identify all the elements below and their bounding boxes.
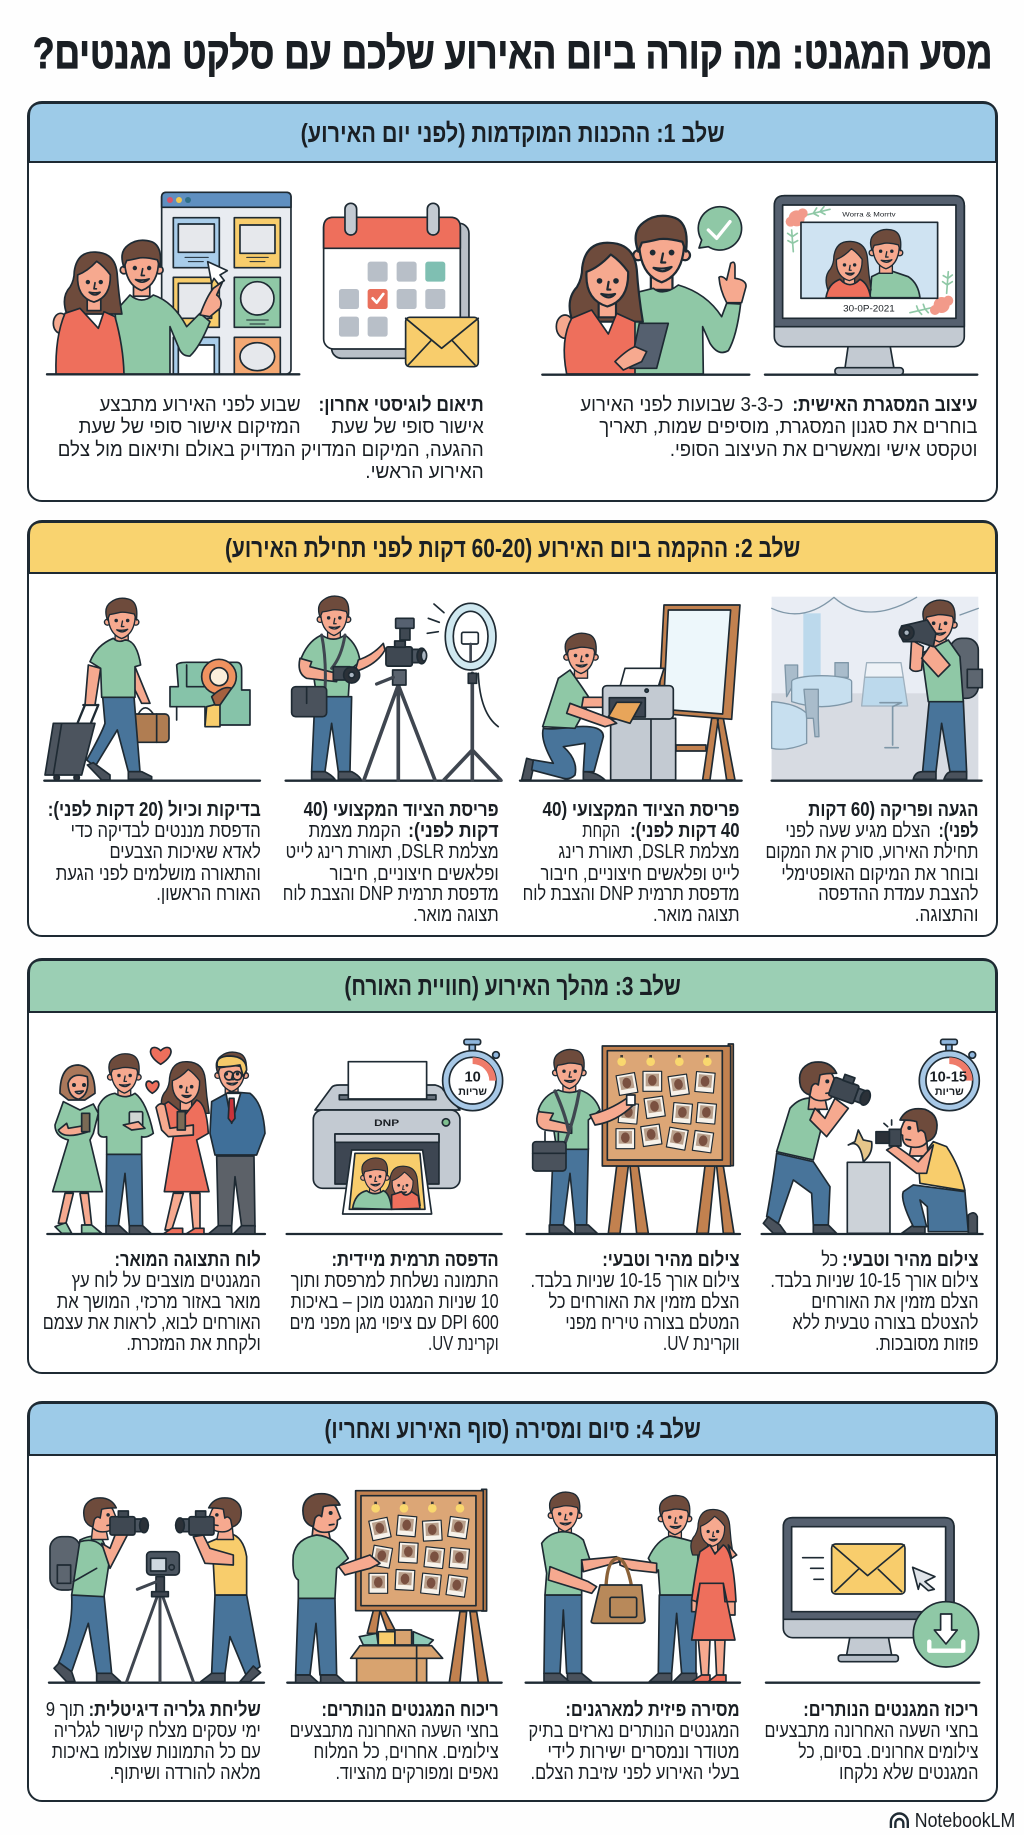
text: arrival and unpacking: הגעה ופריקה (60 דקות	[808, 799, 978, 821]
illustration: DNP printer with 10 second stopwatch: DNP	[374, 1118, 399, 1128]
stopwatch 10 seconds: 10	[464, 1070, 481, 1086]
step 1 header: שלב 1: ההכנות המוקדמות (לפני יום האירוע)	[301, 120, 725, 148]
text: quick natural shooting b: המטלם בצורה טיריח מפני	[565, 1312, 740, 1334]
step 4 header	[29, 1403, 996, 1455]
text: digital gallery: עם כל התמונות שצולמו באיכות	[52, 1741, 261, 1763]
text: equipment setup b: הקמת מצמת	[309, 820, 401, 842]
text: physical handover: בעלי האירוע לפני עזיבת הצלם.	[531, 1762, 740, 1784]
text: instant thermal print: וקרינת UV.	[428, 1333, 499, 1355]
text: lit display board: לוח התצוגה המואר:	[114, 1249, 261, 1271]
illustration: photographers and tripod gallery	[49, 1498, 264, 1683]
text: equipment setup b: תצוגה מואר.	[413, 904, 499, 926]
text: quick natural shooting a: כל	[821, 1249, 838, 1271]
text: arrival and unpacking: ובוחר את המיקום האופטימלי	[781, 863, 978, 885]
step 3 header: שלב 3: מהלך האירוע (חוויית האורח)	[344, 973, 681, 1001]
panel: step 4	[28, 1402, 997, 1801]
text: instant thermal print: 600 DPI עם ציפוי מגן מפני מים	[290, 1312, 499, 1334]
text: arrival and unpacking: הצלם מגיע שעה לפני	[785, 820, 931, 842]
illustration: DNP printer with 10 second stopwatch	[287, 1039, 503, 1234]
text: tests and calibration: בדיקות וכיול (20 דקות לפני):	[48, 799, 261, 821]
text: personal frame design: בוחרים את סגנון המסגרת, מוסיפים שמות, תאריך	[599, 416, 978, 438]
text: collecting remaining magnets b: נאפים ומפורקים מהציוד.	[335, 1762, 499, 1784]
illustration: man pinning magnets on lit board	[527, 1044, 740, 1234]
step 1 header	[29, 103, 996, 162]
text: final logistics coordination: תיאום לוגיסטי אחרון:	[319, 394, 484, 416]
stopwatch 10 seconds	[443, 1039, 503, 1111]
text: quick natural shooting b: הצלם מזמין את האורחים כל	[548, 1291, 740, 1313]
text: lit display board: המגנטים מוצבים על לוח עץ	[72, 1270, 261, 1292]
text: quick natural shooting a: הצלם מזמין את האורחים	[811, 1291, 978, 1313]
text: equipment setup b: ופלאשים חיצוניים, חיבור	[329, 863, 499, 885]
illustration: photographers shooting with stopwatch	[762, 1039, 983, 1234]
text: personal frame design: וטקסט אישי ומאשרים את העיצוב הסופי.	[670, 439, 977, 461]
text: tests and calibration: האורח הראשון.	[156, 883, 261, 905]
text: one week before: המזיקום אישור סופי של שעת	[79, 416, 301, 438]
text: quick natural shooting b: צילום אורך 10-15 שניות בלבד.	[531, 1270, 740, 1292]
illustration: monitor with personal frame	[765, 196, 977, 375]
illustration: man setting printer and easel	[520, 605, 742, 781]
text: equipment setup b: מדפסת תרמית DNP והצבת לוח	[283, 883, 499, 905]
text: collecting remaining magnets b: צילומים. אחרוים, כל המלוח	[314, 1741, 499, 1763]
illustration: magnets handed to organisers	[526, 1492, 740, 1683]
text: collecting remaining magnets b	[290, 1699, 499, 1784]
text: lit display board: ולקחת את המזכרת.	[126, 1333, 261, 1355]
text: collecting remaining magnets a	[764, 1699, 979, 1784]
text: arrival and unpacking: והתצוגה.	[915, 904, 978, 926]
step 2 header	[29, 522, 996, 573]
text: digital gallery: ימי עסקים מצלח קישור לגלריה	[54, 1720, 261, 1742]
text: personal frame design	[580, 394, 978, 461]
text: collecting remaining magnets b: ריכוח המגנטים הנותרים:	[322, 1699, 499, 1721]
text: physical handover: מטודר ונמסרים ישירות לידי	[547, 1741, 740, 1763]
illustration: calendar and envelope	[324, 203, 478, 367]
illustration: photographer scouting venue	[772, 597, 982, 781]
text: equipment setup a: מצלמת DSLR, תאורת רינג	[558, 841, 740, 863]
text: final logistics coordination: האירוע הראשי.	[365, 461, 484, 483]
text: physical handover: מסירה פיזית למארגנים:	[565, 1699, 740, 1721]
text: equipment setup b: פריסת הציוד המקצועי (40	[304, 799, 499, 821]
text: instant thermal print	[290, 1249, 499, 1355]
text: quick natural shooting a: להצטלם בצורה טבעית ללא	[792, 1312, 978, 1334]
panel: step 1	[28, 102, 997, 501]
text: tests and calibration	[48, 799, 261, 905]
text: equipment setup b	[283, 799, 499, 926]
text: one week before	[79, 394, 301, 438]
stopwatch 10-15 seconds: שריות	[935, 1086, 964, 1098]
text: arrival and unpacking	[765, 799, 978, 926]
text: final logistics coordination: אישור סופי של שעת	[331, 416, 484, 438]
text: equipment setup a: מדפסת תרמית DNP והצבת לוח	[523, 883, 740, 905]
text: tests and calibration: והתאורה מושלמים לפני הגעת	[56, 863, 261, 885]
illustration: couple choosing frame templates	[47, 192, 299, 374]
text: arrival and unpacking: להצבת עמדת ההדפסה	[818, 883, 978, 905]
text: digital gallery: שליחת גלריה דיגיטלית:	[89, 1699, 261, 1721]
panel: step 2	[28, 521, 997, 936]
text: quick natural shooting a: פוזות מסובכות.	[875, 1333, 978, 1355]
text: collecting remaining magnets a: בחצי השעה האחרונה מתבצעים	[764, 1720, 979, 1742]
text: equipment setup a	[523, 799, 740, 926]
text: equipment setup a: לייט ופלאשים חיצוניים, חיבור	[541, 863, 740, 885]
illustration: couple approving on tablet	[542, 207, 749, 375]
step 2 header: שלב 2: ההקמה ביום האירוע (60-20 דקות לפני תחילת האירוע)	[225, 535, 800, 563]
stopwatch 10 seconds: שריות	[458, 1086, 487, 1098]
text: instant thermal print: התמונה נשלחת למרפסת ותוך	[291, 1270, 499, 1292]
illustration: guests with magnets	[47, 1047, 265, 1234]
text: lit display board: מואר באזור מרכזי, המושך את	[57, 1291, 261, 1313]
text: equipment setup a: 40 דקות לפני):	[630, 820, 740, 842]
text: quick natural shooting a: צילום מהיר וטבעי:	[842, 1249, 978, 1271]
text: lit display board	[43, 1249, 261, 1355]
illustration: photographer with camera tripod and ring light	[286, 596, 502, 781]
text: physical handover	[529, 1699, 740, 1784]
text: final logistics coordination	[58, 394, 484, 483]
stopwatch 10-15 seconds	[919, 1039, 979, 1111]
text: equipment setup b: דקות לפני):	[408, 820, 499, 842]
text: equipment setup a: תצוגה מואר.	[653, 904, 740, 926]
text: equipment setup a: הקחת	[582, 820, 620, 842]
text: tests and calibration: הדפסת מננטים לבדיקה כדי	[71, 820, 261, 842]
text: arrival and unpacking: לפני):	[939, 820, 978, 842]
text: lit display board: האורחים לבוא, לראות את עצמם	[43, 1312, 261, 1334]
illustration: monitor with personal frame: Worra & Morrtv	[842, 212, 896, 219]
text: personal frame design: כ-3-3 שבועות לפני האירוע	[580, 394, 783, 416]
text: final logistics coordination: ההגעה, המיקום המדויק המדויק באולם ותיאום מול צלם	[58, 439, 484, 461]
illustration: man collecting magnets and box	[287, 1489, 502, 1683]
text: instant thermal print: 10 שניות המגנט מוכן – באיכות	[291, 1291, 499, 1313]
text: collecting remaining magnets a: ריכוז המגנטים הנותרים:	[803, 1699, 978, 1721]
text: physical handover: המגנטים הנותרים נארזים בתיק	[529, 1720, 740, 1742]
text: tests and calibration: לאדא שאיכות הצבעים	[109, 841, 261, 863]
text: quick natural shooting b: ווקרינת UV.	[663, 1333, 740, 1355]
text: digital gallery	[46, 1699, 261, 1784]
text: quick natural shooting b	[531, 1249, 740, 1355]
text: digital gallery: מלאה להורדה ושיתוף.	[109, 1762, 261, 1784]
text: instant thermal print: הדפסה תרמית מיידית:	[331, 1249, 499, 1271]
text: quick natural shooting b: צילום מהיר וטבעי:	[602, 1249, 740, 1271]
text: digital gallery: תוך 9	[46, 1699, 85, 1721]
text: equipment setup b: מצלמת DSLR, תאורת רינג לייט	[286, 841, 499, 863]
illustration: monitor with email and download icon	[766, 1518, 979, 1683]
illustration: monitor with personal frame: 30-0P-2021	[843, 304, 895, 314]
stopwatch 10-15 seconds: 10-15	[930, 1070, 967, 1086]
text: collecting remaining magnets a: צילומים אחרונים. בסיום, כל	[798, 1741, 978, 1763]
text: quick natural shooting a	[770, 1249, 978, 1355]
text: collecting remaining magnets b: בחצי השעה האחרונה מתבצעים	[290, 1720, 499, 1742]
text: arrival and unpacking: תחילת האירוע, סורק את המקום	[765, 841, 978, 863]
panel: step 3	[28, 959, 997, 1373]
text: one week before: שבוע לפני האירוע מתבצע	[100, 394, 301, 416]
text: quick natural shooting a: צילום אורך 10-15 שניות בלבד.	[770, 1270, 978, 1292]
step 3 header	[29, 960, 996, 1012]
illustration: man arriving with suitcase	[44, 598, 260, 781]
step 4 header: שלב 4: סיום ומסירה (סוף האירוע ואחריו)	[325, 1416, 701, 1444]
text: personal frame design: עיצוב המסגרת האישית:	[792, 394, 977, 416]
text: equipment setup a: פריסת הציוד המקצועי (40	[542, 799, 740, 821]
text: collecting remaining magnets a: המגנטים שלא נלקחו	[839, 1762, 978, 1784]
